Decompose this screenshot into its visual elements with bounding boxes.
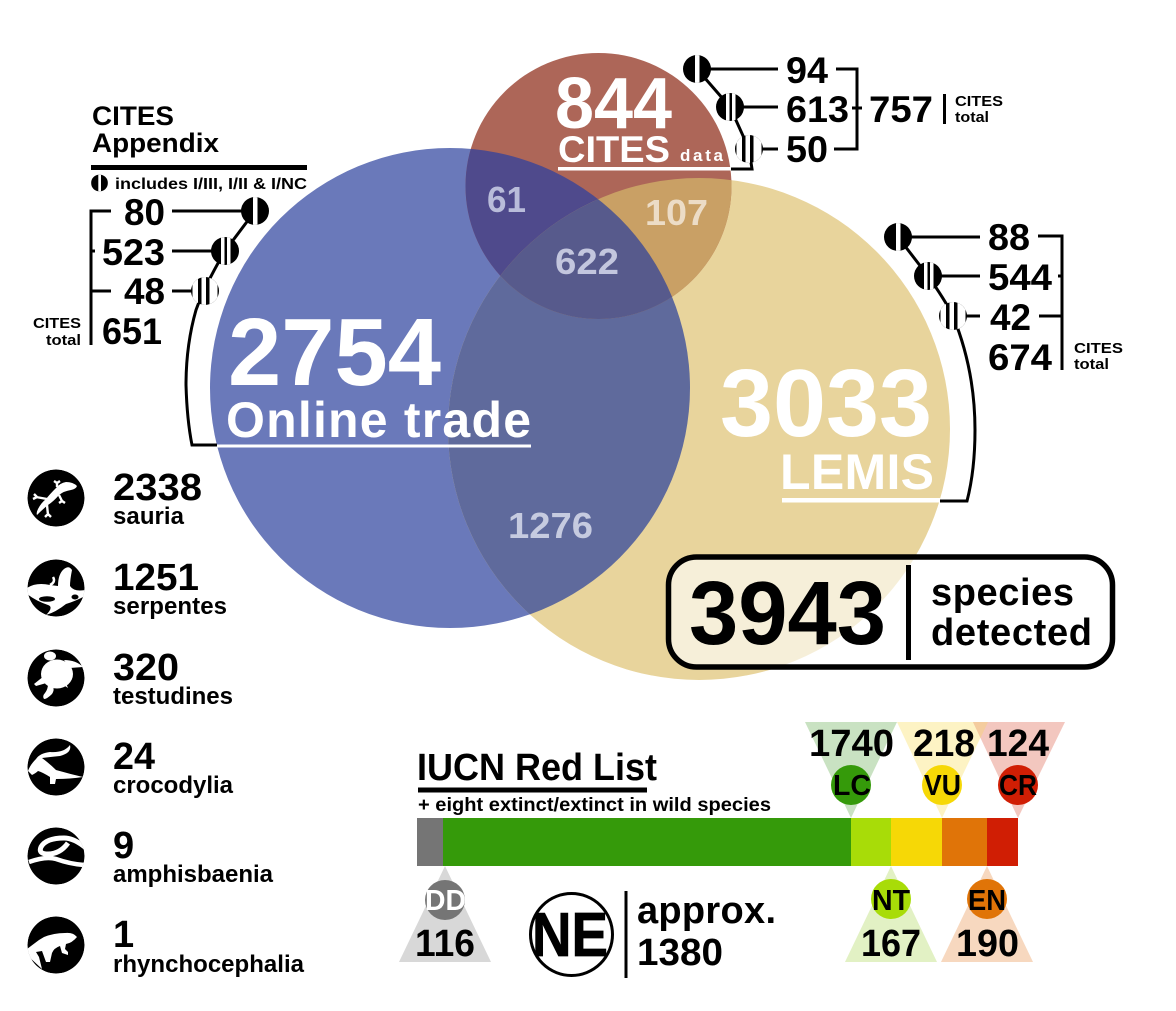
online trade CITES breakdown: 80 xyxy=(124,192,165,233)
circle: online trade xyxy=(210,148,690,628)
label: 844 CITES data: data xyxy=(680,146,724,165)
IUCN EN xyxy=(956,879,1019,965)
IUCN DD: 116 xyxy=(415,923,475,965)
taxa list: 1 xyxy=(113,914,134,956)
online trade CITES breakdown: 651 xyxy=(102,311,162,352)
taxa list: rhynchocephalia xyxy=(113,951,305,978)
label: 3033 LEMIS: 3033 xyxy=(720,350,932,457)
label: 2754 Online trade: 2754 xyxy=(228,299,441,406)
taxa list: 24 xyxy=(113,736,155,778)
taxa list: testudines xyxy=(113,683,233,710)
IUCN DD xyxy=(415,880,475,965)
IUCN NT: 167 xyxy=(861,923,921,965)
IUCN EN: EN xyxy=(968,885,1006,917)
IUCN CR: 124 xyxy=(987,723,1049,765)
IUCN VU: 218 xyxy=(913,723,975,765)
CITES appendix heading: Appendix xyxy=(92,128,219,158)
CITES appendix heading: includes I/III, I/II & I/NC xyxy=(115,176,307,193)
overlap counts xyxy=(487,179,708,546)
online trade CITES breakdown: CITES xyxy=(33,316,81,332)
IUCN DD: DD xyxy=(425,885,466,917)
overlap: online trade and CITES xyxy=(466,149,598,276)
IUCN VU xyxy=(913,723,975,805)
taxa list: serpentes xyxy=(113,593,227,620)
label: 3033 LEMIS: LEMIS xyxy=(780,444,934,500)
IUCN NT xyxy=(861,879,921,965)
species total box: 3943 xyxy=(689,564,886,664)
species total box: species xyxy=(931,572,1074,614)
overlap counts: 1276 xyxy=(508,505,593,546)
overlap counts: 61 xyxy=(487,179,526,220)
IUCN stacked bar xyxy=(417,818,1018,866)
overlap: all three xyxy=(500,199,672,319)
taxa list: crocodylia xyxy=(113,772,234,799)
LEMIS breakdown: total xyxy=(1074,357,1109,373)
venn diagram xyxy=(210,53,950,680)
species total box xyxy=(668,557,1112,667)
LEMIS breakdown: 674 xyxy=(988,337,1052,378)
IUCN Red List heading: IUCN Red List xyxy=(417,747,657,789)
taxa list: 1251 xyxy=(113,557,199,599)
taxa list xyxy=(27,467,305,978)
online trade CITES breakdown: total xyxy=(46,333,81,349)
IUCN Red List heading: + eight extinct/extinct in wild species xyxy=(418,795,771,816)
IUCN callout triangles xyxy=(399,722,1065,962)
IUCN CR: CR xyxy=(999,770,1037,802)
label: 3033 LEMIS xyxy=(720,350,940,502)
circle: CITES data xyxy=(466,53,732,319)
CITES data breakdown: total xyxy=(955,110,989,126)
species total box: detected xyxy=(931,612,1092,654)
IUCN VU: VU xyxy=(924,770,961,802)
icon: rhynchocephalia xyxy=(27,916,84,974)
icon: sauria xyxy=(28,470,84,526)
icon: amphisbaenia xyxy=(28,828,86,884)
CITES data breakdown xyxy=(683,50,1003,170)
CITES data breakdown: 50 xyxy=(786,129,828,170)
icon: crocodylia xyxy=(28,738,84,796)
LEMIS breakdown: 42 xyxy=(990,297,1031,338)
LEMIS breakdown: 544 xyxy=(988,257,1052,298)
IUCN NE: 1380 xyxy=(637,932,723,974)
online trade CITES breakdown: 48 xyxy=(124,271,165,312)
CITES data breakdown: 613 xyxy=(786,89,849,130)
IUCN NE: NE xyxy=(532,901,608,970)
overlap counts: 622 xyxy=(555,241,619,282)
IUCN LC: LC xyxy=(833,770,871,802)
IUCN LC: 1740 xyxy=(809,723,894,765)
CITES data breakdown: 94 xyxy=(786,50,828,91)
LEMIS breakdown: 88 xyxy=(988,217,1030,258)
CITES appendix heading xyxy=(91,101,307,193)
CITES data breakdown: CITES xyxy=(955,94,1003,110)
online trade CITES breakdown xyxy=(33,192,269,445)
IUCN LC xyxy=(809,723,894,805)
IUCN Red List heading xyxy=(417,747,771,816)
icon: serpentes xyxy=(27,560,85,616)
label: 844 CITES data: CITES xyxy=(558,129,670,170)
label: 844 CITES data: 844 xyxy=(555,64,672,144)
taxa list: 2338 xyxy=(113,467,202,509)
overlap: online trade and LEMIS xyxy=(448,276,690,614)
taxa list: 9 xyxy=(113,825,134,867)
taxa list: 320 xyxy=(113,647,179,689)
taxa list: sauria xyxy=(113,503,185,530)
IUCN NT: NT xyxy=(872,885,910,917)
circle: LEMIS xyxy=(448,178,950,680)
overlap counts: 107 xyxy=(645,192,708,233)
online trade CITES breakdown: 523 xyxy=(102,232,165,273)
IUCN NE: approx. xyxy=(637,890,776,932)
taxa list: amphisbaenia xyxy=(113,861,274,888)
CITES appendix heading: CITES xyxy=(92,101,174,131)
label: 2754 Online trade: Online trade xyxy=(226,392,531,448)
LEMIS breakdown xyxy=(884,217,1123,501)
icon: testudines xyxy=(28,650,84,706)
LEMIS breakdown: CITES xyxy=(1074,341,1123,357)
CITES data breakdown: 757 xyxy=(869,89,933,130)
IUCN NE xyxy=(530,890,776,978)
IUCN EN: 190 xyxy=(956,923,1019,965)
overlap: CITES and LEMIS xyxy=(500,178,732,319)
label: 2754 Online trade xyxy=(217,299,531,448)
IUCN CR xyxy=(987,723,1049,805)
label: 844 CITES data xyxy=(555,64,731,170)
